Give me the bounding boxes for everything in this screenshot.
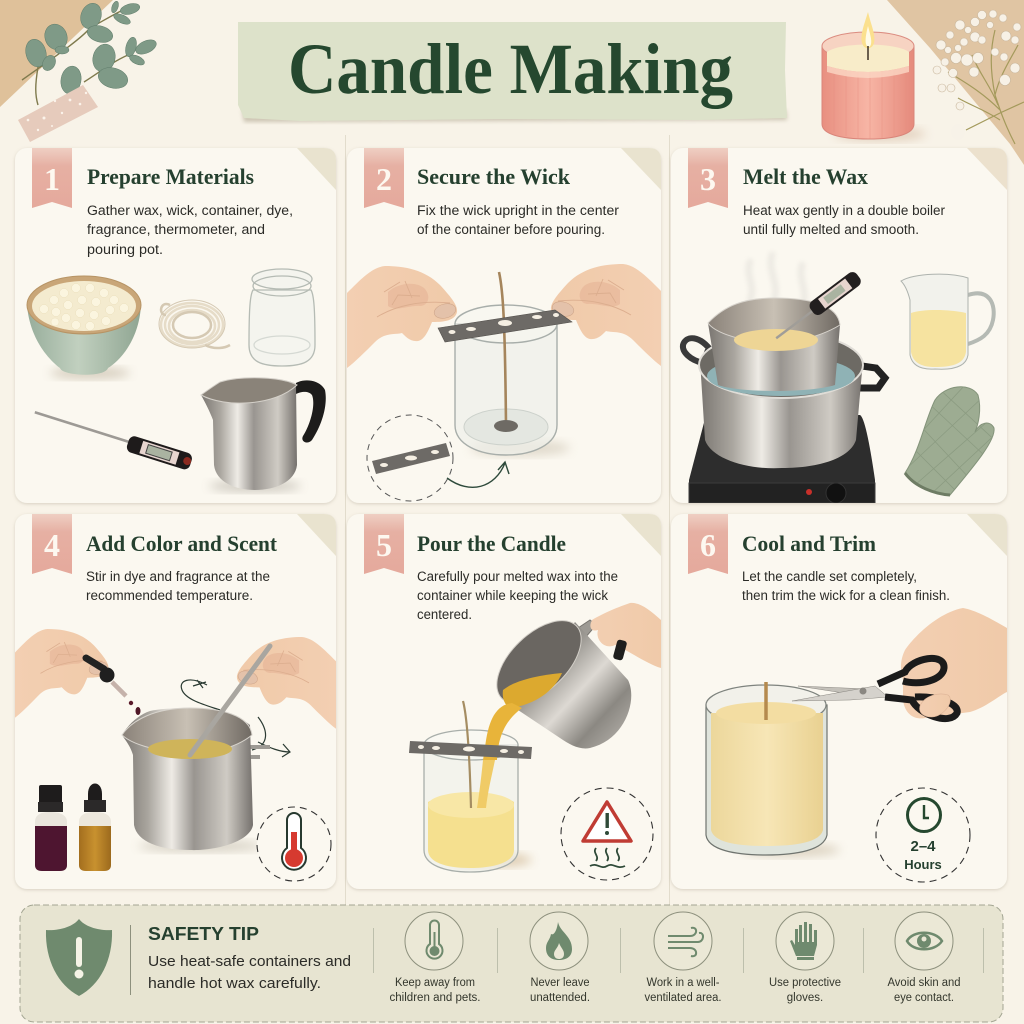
steam bbox=[749, 255, 804, 305]
heading: Secure the Wick bbox=[417, 164, 571, 189]
digital thermometer bbox=[32, 405, 193, 471]
ribbon: 6 bbox=[700, 527, 716, 563]
body text: of the container before pouring. bbox=[417, 222, 605, 237]
safety tip text bbox=[148, 924, 351, 992]
card bbox=[671, 514, 1007, 889]
hot plate bbox=[689, 415, 875, 503]
tip: ventilated bbox=[644, 912, 722, 1004]
ribbon: 4 bbox=[44, 527, 60, 563]
safety tip text: handle hot wax carefully. bbox=[148, 975, 321, 992]
body text: then trim the wick for a clean finish. bbox=[742, 588, 950, 603]
shield icon bbox=[46, 919, 112, 996]
right hand bbox=[551, 264, 661, 366]
tip: gloves: gloves. bbox=[787, 992, 823, 1004]
ribbon: 5 bbox=[376, 527, 392, 563]
tip: never leave: Never leave bbox=[530, 977, 590, 989]
bowl of wax flakes bbox=[27, 276, 141, 379]
wax stream bbox=[477, 703, 522, 808]
tip: keep away: children and pets. bbox=[390, 992, 480, 1004]
tip: eye contact bbox=[888, 912, 960, 1004]
glass container bbox=[455, 305, 570, 456]
tip: eye contact: eye contact. bbox=[894, 992, 954, 1004]
page fold bbox=[621, 148, 661, 190]
time badge bbox=[876, 788, 970, 882]
card bbox=[15, 514, 336, 889]
outer pot bbox=[683, 332, 885, 468]
panel: step 1 prepare materials bbox=[15, 148, 336, 503]
hand holding scissors bbox=[901, 608, 1007, 718]
candle flame bbox=[861, 12, 874, 48]
tip: gloves: Use protective bbox=[769, 977, 841, 989]
baby's breath flowers bbox=[933, 10, 1024, 144]
heading: Prepare Materials bbox=[87, 164, 254, 189]
wick bbox=[463, 701, 471, 808]
body text bbox=[742, 569, 950, 603]
ribbon: 1 bbox=[44, 161, 60, 197]
vertical divider bbox=[130, 925, 131, 995]
page fold bbox=[621, 514, 661, 556]
body text: until fully melted and smooth. bbox=[743, 222, 919, 237]
right hand bbox=[237, 637, 336, 729]
left hand bbox=[15, 629, 109, 718]
coil of wick bbox=[159, 300, 230, 348]
tip: gloves bbox=[769, 912, 841, 1004]
panel: step 5 pour the candle bbox=[347, 514, 661, 889]
title: Candle Making bbox=[288, 29, 733, 109]
eucalyptus sprig bbox=[22, 0, 159, 105]
washi tape bbox=[18, 85, 98, 142]
tip: eye contact: Avoid skin and bbox=[888, 977, 960, 989]
digital thermometer in pot bbox=[771, 270, 863, 344]
heading: Cool and Trim bbox=[742, 531, 876, 556]
ribbon bbox=[32, 514, 72, 574]
body text bbox=[417, 569, 618, 622]
tip: ventilated: Work in a well- bbox=[646, 977, 720, 989]
heading: Melt the Wax bbox=[743, 164, 868, 189]
kraft paper corner left bbox=[0, 0, 113, 107]
card bbox=[15, 148, 336, 503]
tip: never leave bbox=[530, 912, 590, 1004]
page fold bbox=[967, 514, 1007, 556]
ribbon: 3 bbox=[700, 161, 716, 197]
body text bbox=[417, 203, 620, 237]
body text: fragrance, thermometer, and bbox=[87, 222, 265, 237]
finished candle in glass bbox=[706, 685, 840, 857]
time badge: Hours bbox=[904, 857, 942, 872]
body text: container while keeping the wick bbox=[417, 588, 608, 603]
title banner bbox=[238, 22, 787, 122]
panel: step 3 melt the wax bbox=[671, 148, 1007, 503]
card bbox=[347, 514, 661, 889]
body text: centered. bbox=[417, 607, 472, 622]
hand on handle bbox=[590, 603, 661, 668]
scissors bbox=[792, 658, 957, 719]
left hand bbox=[347, 266, 457, 368]
time badge: 2–4 bbox=[910, 838, 936, 855]
wick with sustainer bbox=[494, 272, 518, 432]
body text bbox=[743, 203, 945, 237]
glass jug with wax bbox=[901, 274, 994, 369]
ribbon bbox=[32, 148, 72, 208]
body text: recommended temperature. bbox=[86, 588, 253, 603]
inner pot bbox=[708, 298, 840, 391]
wick holder bar bbox=[409, 741, 532, 759]
tip: ventilated: ventilated area. bbox=[644, 992, 722, 1004]
stirring arrows bbox=[181, 680, 290, 757]
glass jar bbox=[249, 269, 315, 366]
glass with wax bbox=[424, 730, 532, 872]
panel: safety tip banner bbox=[20, 905, 1003, 1022]
ribbon bbox=[364, 514, 404, 574]
card bbox=[347, 148, 661, 503]
tilted pitcher bbox=[482, 606, 631, 748]
panel: step 4 add color and scent bbox=[15, 514, 336, 889]
tip: keep away bbox=[390, 912, 480, 1004]
bottle of dark dye bbox=[35, 785, 67, 871]
ribbon bbox=[364, 148, 404, 208]
page fold bbox=[297, 514, 336, 556]
heading: Pour the Candle bbox=[417, 531, 566, 556]
panel: step 6 cool and trim bbox=[671, 514, 1007, 889]
thumb bbox=[920, 694, 950, 717]
page fold bbox=[297, 148, 336, 190]
dropper bbox=[86, 658, 140, 715]
arrow bbox=[447, 462, 509, 487]
ribbon: 2 bbox=[376, 161, 392, 197]
panel: step 2 secure the wick bbox=[347, 148, 661, 503]
body text bbox=[87, 203, 293, 257]
body text: pouring pot. bbox=[87, 242, 163, 257]
temperature badge bbox=[257, 807, 331, 881]
black pitcher grip bbox=[613, 639, 627, 661]
body text: Gather wax, wick, container, dye, bbox=[87, 203, 293, 218]
body text: Fix the wick upright in the center bbox=[417, 203, 620, 218]
stirring spoon bbox=[190, 646, 270, 755]
detail circle with bar bbox=[367, 415, 453, 501]
tip: never leave: unattended. bbox=[530, 992, 590, 1004]
wick bbox=[764, 682, 768, 720]
kraft paper corner right bbox=[887, 0, 1024, 165]
ribbon bbox=[688, 148, 728, 208]
body text: Heat wax gently in a double boiler bbox=[743, 203, 945, 218]
pot bbox=[122, 708, 270, 852]
body text: Carefully pour melted wax into the bbox=[417, 569, 618, 584]
warning badge bbox=[561, 788, 653, 880]
pouring pot bbox=[201, 378, 326, 492]
body text bbox=[86, 569, 270, 603]
banner background bbox=[20, 905, 1003, 1022]
bottle of amber fragrance bbox=[79, 784, 111, 871]
body text: Let the candle set completely, bbox=[742, 569, 917, 584]
heading: Add Color and Scent bbox=[86, 531, 278, 556]
tip: keep away: Keep away from bbox=[395, 977, 475, 989]
safety tip text: SAFETY TIP bbox=[148, 924, 259, 944]
candle in pink glass bbox=[822, 12, 926, 141]
card bbox=[671, 148, 1007, 503]
safety tip text: Use heat-safe containers and bbox=[148, 953, 351, 970]
oven mitt bbox=[905, 385, 1000, 500]
page fold bbox=[967, 148, 1007, 190]
wick holder bar bbox=[438, 310, 572, 342]
ribbon bbox=[688, 514, 728, 574]
body text: Stir in dye and fragrance at the bbox=[86, 569, 270, 584]
